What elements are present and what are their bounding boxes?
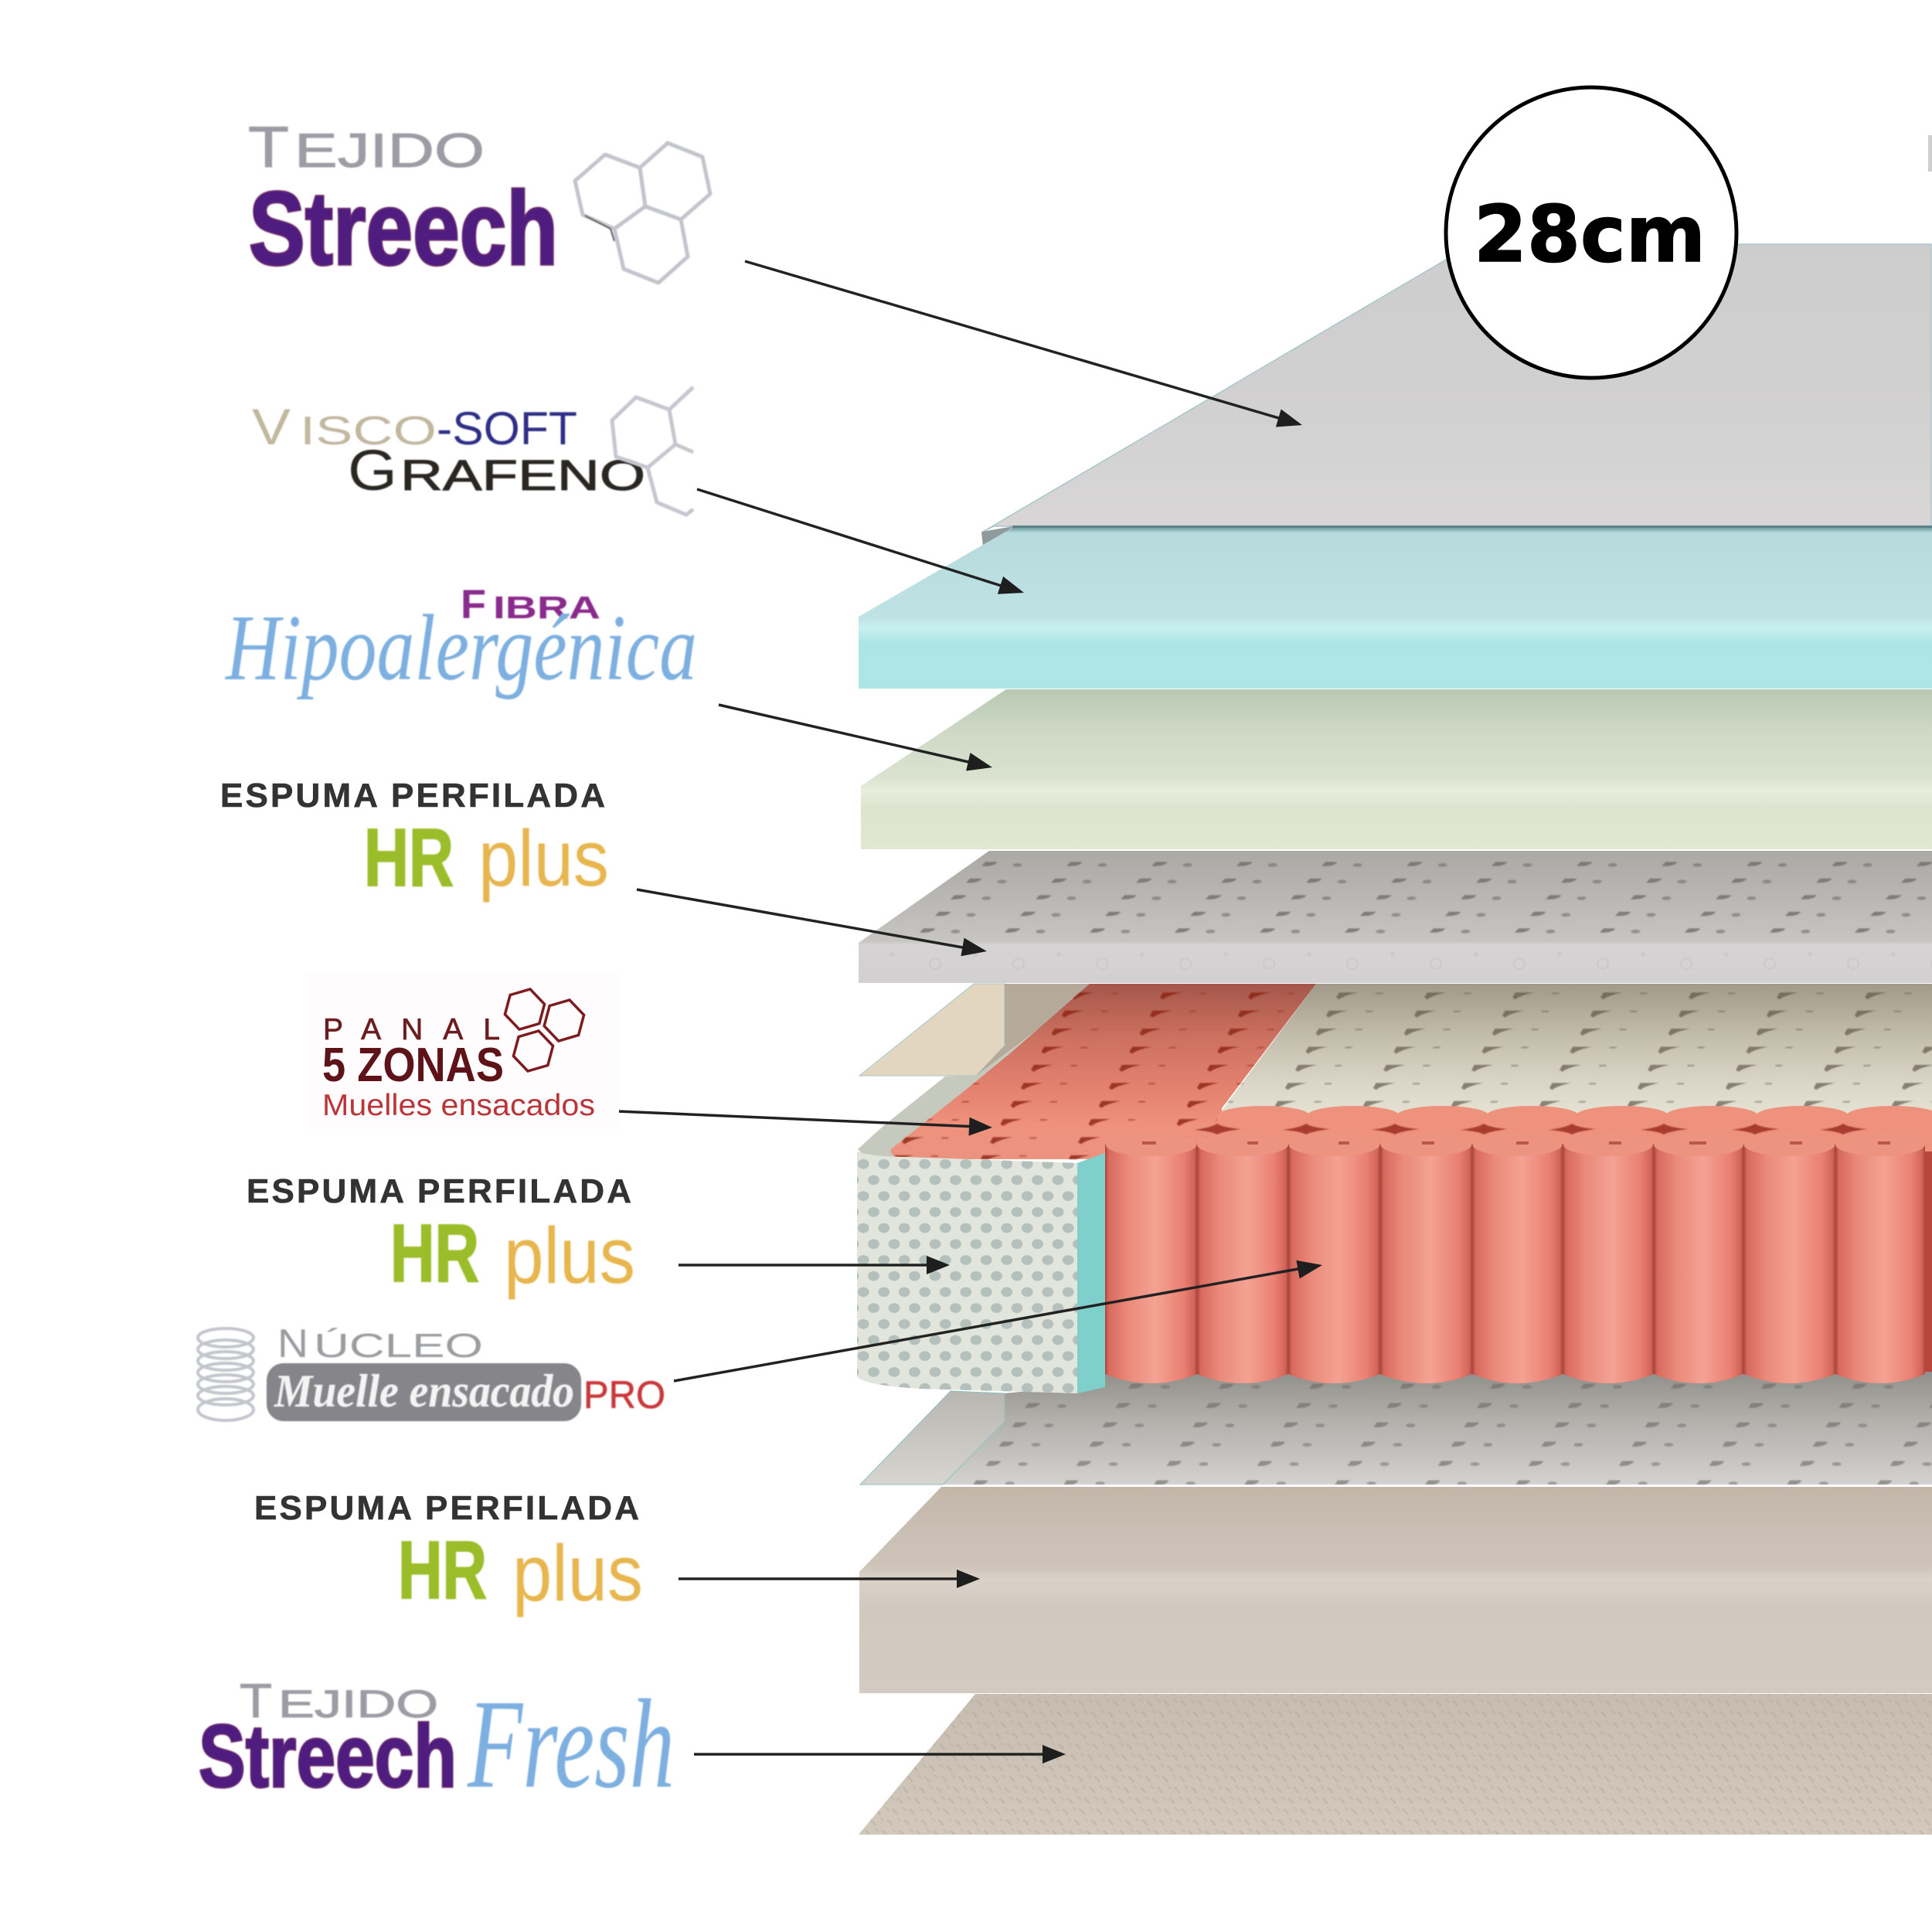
foam encasement corner block <box>857 1151 1105 1393</box>
arrow: streech fresh <box>694 1745 1066 1764</box>
label: Visco-soft Grafeno: -SOFT <box>437 403 577 454</box>
label: Espuma perfilada HR plus (lower): plus <box>512 1529 643 1617</box>
label: Tejido Streech: EJIDO <box>294 124 485 178</box>
label: Núcleo Muelle ensacado PRO: ÚCLEO <box>314 1327 483 1365</box>
label: Tejido Streech <box>248 114 558 287</box>
arrow: espuma perfilada lower <box>679 1570 980 1588</box>
badge: 28cm height: 28cm <box>1474 189 1706 280</box>
label: Espuma perfilada HR plus (lower): HR <box>398 1525 487 1616</box>
label: Núcleo Muelle ensacado PRO: PRO <box>583 1373 665 1417</box>
arrow: núcleo muelle ensacado <box>674 1256 1324 1381</box>
label: Tejido Streech: Streech <box>249 170 558 287</box>
label: Núcleo Muelle ensacado PRO <box>198 1321 665 1421</box>
label: Tejido Streech: T <box>248 114 289 179</box>
label: Visco-soft Grafeno: ISCO <box>300 409 437 454</box>
layer: profiled HR plus foam lower sheet <box>860 1364 1932 1485</box>
arrow: espuma perfilada middle <box>679 1256 950 1274</box>
coral spring tops row <box>1217 1106 1932 1159</box>
label: Visco-soft Grafeno: V <box>252 398 291 455</box>
label: Panal 5 Zonas Muelles ensacados: PANAL <box>323 1013 500 1046</box>
label: Panal 5 Zonas Muelles ensacados: 5 ZONAS <box>322 1039 504 1092</box>
layer: profiled HR plus foam base <box>859 1487 1932 1693</box>
label: Tejido Streech Fresh: Fresh <box>467 1673 675 1815</box>
label: Visco-soft Grafeno: RAFENO <box>400 451 645 499</box>
icon: graphene molecule <box>612 387 693 515</box>
dark notches between spring tops <box>1194 1124 1867 1134</box>
arrow: stretch fabric <box>745 261 1304 434</box>
coral zone <box>891 984 1316 1159</box>
icon: grey honeycomb <box>575 143 710 283</box>
label: Fibra Hipoalergénica: F <box>461 582 486 628</box>
arrow: espuma perfilada upper <box>637 889 988 961</box>
layer: profiled HR plus foam upper <box>859 851 1932 983</box>
arrow: panal 5 zonas <box>617 1111 993 1137</box>
icon: red honeycomb <box>502 985 587 1076</box>
label: Espuma perfilada HR plus (middle): plus <box>504 1211 635 1300</box>
label: Espuma perfilada HR plus (upper) <box>220 777 609 903</box>
label: Visco-soft Grafeno <box>252 398 645 502</box>
label: Núcleo Muelle ensacado PRO: Muelle ensacado <box>274 1366 574 1417</box>
arrow: fibra hipoalergénica <box>719 705 995 777</box>
cover border strip <box>858 1016 1055 1158</box>
label: Visco-soft Grafeno: G <box>348 438 397 502</box>
layer: visco-soft graphene foam <box>859 528 1932 689</box>
beige inner sheet <box>859 984 1005 1076</box>
label: Tejido Streech Fresh: T <box>240 1675 272 1728</box>
icon: spring coil <box>198 1328 253 1420</box>
layer: stretch fresh bottom fabric <box>859 1694 1932 1835</box>
layer: top stretch fabric <box>981 135 1932 547</box>
label: Panal 5 Zonas Muelles ensacados: Muelles ensacados <box>322 1089 595 1122</box>
label: Espuma perfilada HR plus (upper): ESPUMA PERFILADA <box>220 777 605 815</box>
label: Fibra Hipoalergénica: IBRA <box>493 590 600 625</box>
layer: hypoallergenic fibre <box>861 689 1932 849</box>
label: Espuma perfilada HR plus (lower) <box>254 1489 643 1617</box>
label: Tejido Streech Fresh <box>199 1673 675 1815</box>
teal side of encasement <box>1077 1153 1105 1393</box>
label: Espuma perfilada HR plus (middle): ESPUMA PERFILADA <box>247 1172 631 1210</box>
inner wall of core <box>976 984 1097 1076</box>
label: Espuma perfilada HR plus (upper): plus <box>478 814 609 903</box>
label: Espuma perfilada HR plus (middle): HR <box>390 1208 479 1299</box>
label: Panal 5 Zonas Muelles ensacados <box>307 972 619 1129</box>
cream centre zone <box>1217 984 1932 1117</box>
label: Fibra Hipoalergénica: Hipoalergénica <box>224 596 697 700</box>
label: Núcleo Muelle ensacado PRO: N <box>277 1321 308 1366</box>
label: Tejido Streech Fresh: Streech <box>199 1707 457 1806</box>
label: Tejido Streech Fresh: EJIDO <box>278 1682 438 1726</box>
label: Espuma perfilada HR plus (middle) <box>247 1172 635 1300</box>
layer: five zone pocket spring core <box>858 984 1932 1383</box>
badge: 28cm height <box>1446 87 1736 378</box>
label: Espuma perfilada HR plus (lower): ESPUMA PERFILADA <box>254 1489 639 1527</box>
arrow: visco-soft grafeno <box>697 489 1027 601</box>
label: Espuma perfilada HR plus (upper): HR <box>364 812 454 903</box>
pocket spring cylinders <box>1105 1133 1932 1383</box>
